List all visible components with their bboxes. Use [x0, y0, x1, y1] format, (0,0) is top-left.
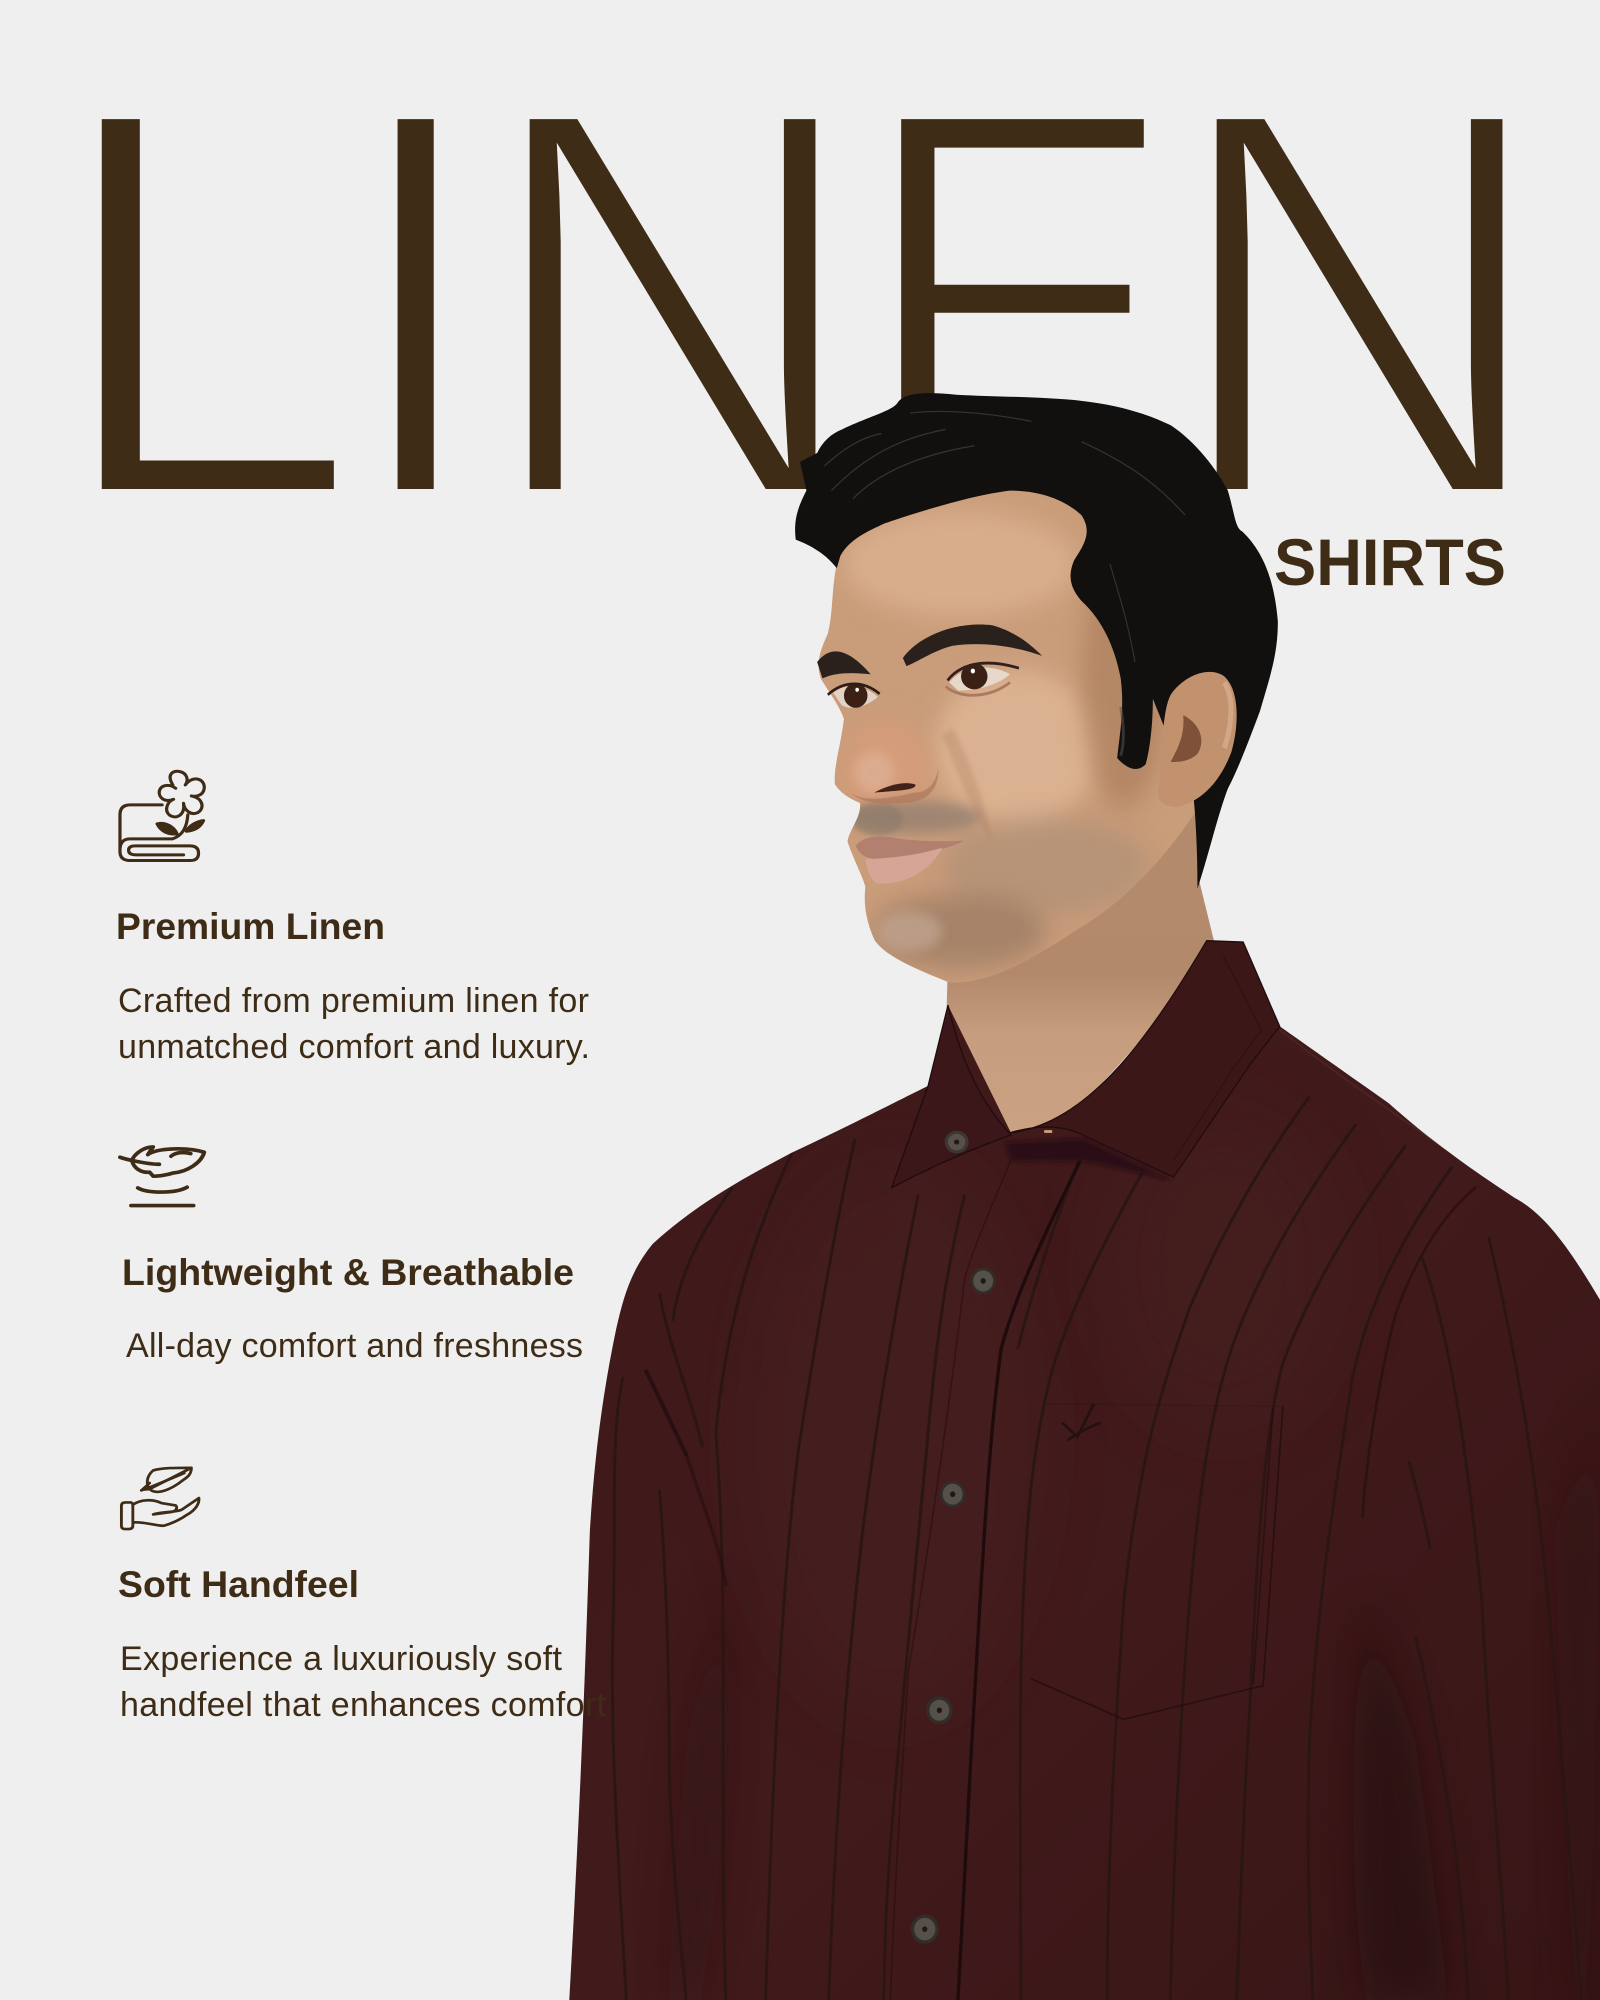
ear	[1158, 672, 1237, 807]
armhole seams	[646, 1188, 1475, 1584]
left brow	[817, 651, 871, 678]
neck	[946, 790, 1215, 1160]
left eye	[828, 683, 880, 708]
feature: Premium Linen	[116, 771, 590, 1066]
title: LINEN: E	[855, 0, 1181, 615]
model photo illustration	[569, 393, 1600, 2000]
description line: Experience a luxuriously soft	[120, 1640, 563, 1678]
right brow	[903, 625, 1042, 666]
icon: towel with flower	[120, 771, 204, 861]
placket	[890, 1153, 1084, 2000]
feature: Lightweight & Breathable	[120, 1147, 583, 1365]
right eye	[946, 663, 1019, 695]
shirt	[569, 941, 1600, 2000]
heading: Soft Handfeel	[118, 1564, 359, 1605]
buttons	[911, 1131, 996, 1944]
feature: Soft Handfeel (icon and heading)	[118, 1468, 563, 1678]
title: LINEN: N	[1166, 0, 1553, 614]
pocket	[1031, 1404, 1283, 1719]
description: unmatched comfort and luxury.	[118, 1028, 590, 1066]
shirt shading	[612, 1030, 1600, 2000]
heading: Premium Linen	[116, 906, 385, 947]
icon: hand with leaf	[121, 1468, 199, 1529]
nostril	[874, 783, 915, 793]
title: LINEN	[49, 0, 1553, 615]
title: LINEN: N	[479, 0, 866, 614]
collar shadow	[1004, 1139, 1174, 1181]
collar right	[1010, 941, 1280, 1177]
description: All-day comfort and freshness	[126, 1327, 583, 1365]
collar left	[892, 1005, 1011, 1188]
hair	[795, 393, 1278, 889]
hair highlights	[824, 411, 1185, 756]
title: LINEN: I	[342, 0, 489, 615]
description line over the sleeve edge: handfeel that enhances comfort	[120, 1686, 607, 1724]
description	[118, 982, 590, 1066]
logo	[1062, 1404, 1101, 1440]
title: LINEN: L	[49, 0, 359, 615]
shoulder seam	[1280, 1030, 1515, 1198]
subtitle: SHIRTS: SHIRTS	[1274, 525, 1506, 599]
lips	[856, 836, 964, 859]
description: Crafted from premium linen for	[118, 982, 589, 1020]
head	[795, 393, 1278, 983]
shirt body	[569, 941, 1600, 2000]
face shading	[842, 511, 1167, 968]
stripes	[612, 1096, 1581, 2000]
face	[819, 462, 1197, 983]
icon: feather	[120, 1147, 204, 1206]
heading: Lightweight & Breathable	[122, 1252, 574, 1293]
